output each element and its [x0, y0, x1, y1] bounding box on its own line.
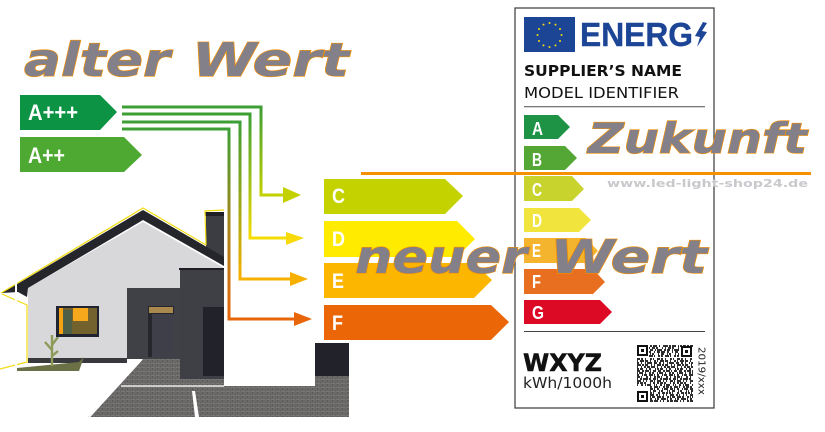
heading: Zukunft: Zukunft [586, 114, 809, 163]
shrub [45, 335, 58, 366]
consumption unit: kWh/1000h [523, 374, 612, 392]
supplier name: SUPPLIER’S NAME [524, 62, 682, 80]
new class arrow D [324, 221, 475, 257]
class C: C [532, 180, 542, 200]
icon: lightning bolt [695, 22, 707, 47]
class E: E [532, 241, 541, 261]
consumption value: WXYZ [523, 349, 602, 377]
heading: neuer Wert: neuer [355, 230, 531, 284]
arrow: A+++ to C [122, 107, 301, 203]
class A: A [532, 119, 543, 139]
new class arrow E [324, 263, 492, 298]
arrow: A+++ to E [122, 122, 308, 286]
arrow: A+++ to F [122, 129, 312, 326]
garage door [203, 307, 224, 376]
class A [524, 115, 570, 139]
website URL: www.led-light-shop24.de [607, 177, 808, 190]
paving [88, 358, 349, 417]
icon: EU flag [524, 17, 575, 52]
class B: B [532, 150, 542, 170]
new class arrow F [324, 305, 509, 340]
window [56, 306, 99, 337]
class F: F [532, 272, 541, 292]
class C [524, 176, 584, 201]
energy label panel [515, 8, 714, 408]
arrow: A+++ to D [122, 114, 304, 245]
new class arrow F: F [332, 312, 343, 335]
divider line in orange [361, 172, 811, 175]
class G: G [532, 303, 544, 323]
house photo [0, 208, 349, 417]
model identifier: MODEL IDENTIFIER [524, 84, 679, 102]
roof [2, 210, 224, 297]
front door [148, 306, 174, 357]
grass [17, 357, 84, 371]
dark garage block [180, 269, 224, 379]
class D [524, 208, 591, 232]
wall [28, 222, 224, 358]
heading: neuer Wert [355, 230, 710, 284]
regulation number: 2019/xxx [696, 347, 706, 395]
class F [524, 269, 605, 294]
chimney [206, 213, 224, 262]
new class arrow D: D [332, 228, 345, 251]
new class arrow C: C [332, 185, 345, 208]
class D: D [532, 211, 542, 231]
class B [524, 146, 577, 170]
class E [524, 238, 598, 263]
class G [524, 300, 612, 324]
new class arrow E: E [332, 270, 344, 293]
ENERG wordmark: ENERG [580, 16, 693, 53]
dark entrance block [127, 288, 181, 359]
heading: alter Wert [24, 33, 352, 87]
QR code [637, 346, 693, 401]
old class arrow A++: A++ [28, 143, 65, 168]
old class arrow A+++: A+++ [28, 100, 78, 125]
old class arrow A++ [20, 137, 142, 172]
heading: alter Wert: alter [24, 33, 174, 87]
heading: alter Wert: Wert [192, 33, 352, 87]
old class arrow A+++ [20, 95, 117, 130]
new class arrow C [324, 179, 463, 214]
heading: neuer Wert: Wert [550, 230, 710, 284]
